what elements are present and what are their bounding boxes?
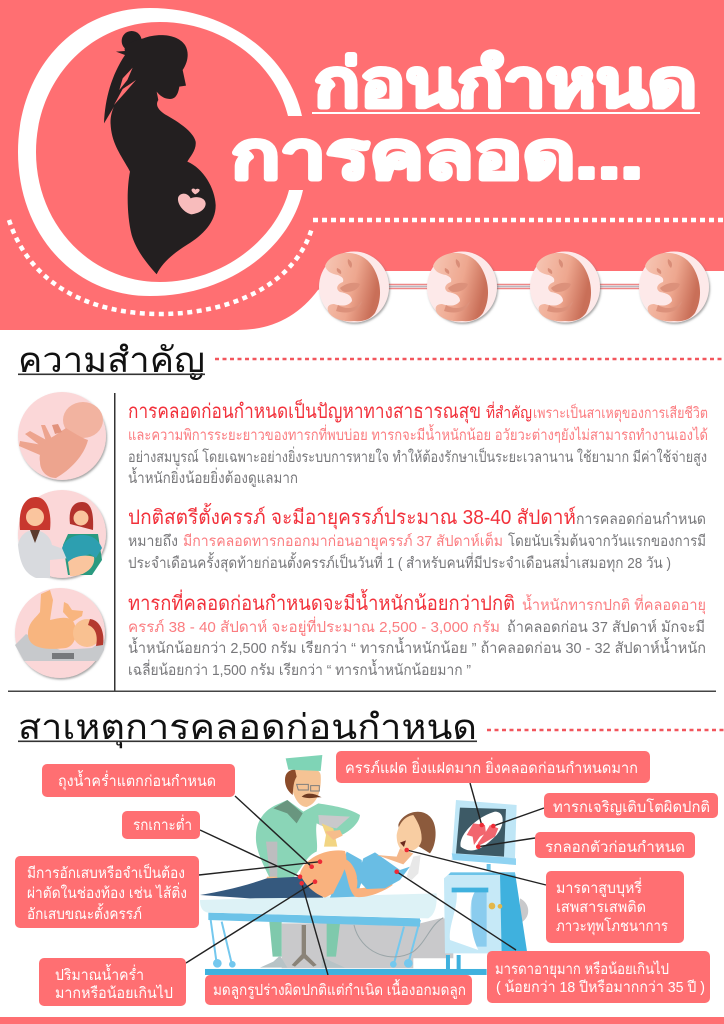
- doctor neck and face: [291, 767, 321, 807]
- dotted line: [313, 218, 724, 222]
- callout: uterus: มดลูกรูปร่างผิดปกติแต่กำเนิด เนื้องอกมดลูก: [213, 979, 466, 999]
- callout: smoking and malnutrition: ภาวะทุพโภชนาการ: [556, 917, 668, 936]
- callout: twins: [336, 751, 650, 783]
- text block 1: การคลอดก่อนกำหนดเป็นปัญหาทางสาธารณสุข: [128, 398, 481, 424]
- callout: inflammation: อักเสบขณะตั้งครรภ์: [27, 903, 142, 923]
- text block 1: [128, 398, 708, 487]
- white ring around silhouette: [18, 8, 303, 296]
- machine stand: [446, 955, 461, 969]
- mattress: [200, 893, 437, 918]
- title line 2: การคลอด...: [231, 118, 643, 192]
- monitor: [452, 800, 517, 860]
- text block 3: ทารกที่คลอดก่อนกำหนดจะมีน้ำหนักน้อยกว่าปกติ: [128, 589, 515, 615]
- text block 3: ถ้าคลอดก่อน 37 สัปดาห์ มักจะมี: [507, 619, 705, 636]
- icon: baby on scale circle: [15, 588, 105, 678]
- machine knobs: [489, 903, 502, 909]
- doctor hat: [286, 755, 322, 771]
- callout: twins: ครรภ์แฝด ยิ่งแฝดมาก ยิ่งคลอดก่อนกำหนดมาก: [345, 757, 638, 777]
- pillow: [407, 855, 421, 880]
- doctor moustache: [302, 794, 322, 798]
- callout: placental abruption: [535, 832, 695, 858]
- callout: uterus: [205, 975, 472, 1005]
- patient chest: [377, 848, 413, 864]
- doctor hair: [285, 769, 297, 795]
- ultrasound probe: [322, 823, 337, 847]
- doctor legs: [269, 922, 340, 957]
- callout pointer dots: [298, 823, 496, 886]
- fetus image 4: [639, 252, 709, 322]
- doctor glasses: [297, 784, 319, 791]
- callout: maternal age: [487, 951, 710, 1003]
- heading: causes: สาเหตุการคลอดก่อนกำหนด: [18, 708, 477, 748]
- callout: maternal age: ( น้อยกว่า 18 ปีหรือมากกว่า 35 ปี ): [496, 979, 705, 996]
- doctor hand: [267, 877, 283, 894]
- connecting lines between fetus images: [385, 284, 650, 286]
- callout: smoking and malnutrition: มารดาสูบบุหรี่: [556, 877, 642, 898]
- text block 3: เฉลี่ยน้อยกว่า 1,500 กรัม เรียกว่า “ ทารกน้ำหนักน้อยมาก ”: [128, 659, 471, 679]
- callout: low placenta: รกเกาะต่ำ: [133, 814, 192, 834]
- text block 2: การคลอดก่อนกำหนด: [576, 511, 706, 528]
- patient blue skirt: [330, 852, 363, 898]
- dotted arc: [9, 220, 312, 314]
- callout: amniotic fluid: [39, 958, 186, 1006]
- shoes: [260, 956, 345, 968]
- doctor body: [256, 800, 360, 878]
- callout: amniotic fluid: ปริมาณน้ำคร่ำ: [55, 964, 144, 984]
- patient shirt: [357, 852, 410, 889]
- patient belly: [300, 850, 346, 898]
- fetus image 2: [427, 252, 497, 322]
- callout: ruptured membranes: ถุงน้ำคร่ำแตกก่อนกำหนด: [58, 770, 216, 791]
- header banner: [0, 0, 724, 330]
- callout: abnormal growth: [544, 793, 718, 818]
- text block 2: มีการคลอดทารกออกมาก่อนอายุครรภ์ 37 สัปดาห์เต็ม: [183, 531, 503, 551]
- cable: [354, 918, 443, 957]
- callout: inflammation: [15, 856, 199, 928]
- bed legs: [210, 915, 420, 963]
- bottom bar: [0, 1017, 724, 1024]
- illustration: doctor, patient and ultrasound: [200, 755, 528, 975]
- fetus image 3: [530, 252, 600, 322]
- icon: heart: [178, 194, 206, 214]
- bed wheels: [213, 959, 413, 968]
- callout: low placenta: [122, 811, 200, 839]
- callout: ruptured membranes: [42, 764, 235, 797]
- text block 3: น้ำหนักน้อยกว่า 2,500 กรัม เรียกว่า “ ทารกน้ำหนักน้อย ” ถ้าคลอดก่อน 30 - 32 สัปดาห์น้ำหนัก: [128, 637, 706, 657]
- callout pointer lines: [186, 783, 546, 975]
- text block 3: ครรภ์ 38 - 40 สัปดาห์ จะอยู่ที่ประมาณ 2,500 - 3,000 กรัม: [128, 616, 500, 636]
- text block 1: ที่สำคัญ: [486, 401, 532, 422]
- icon: small heart: [192, 188, 200, 194]
- text block 3: น้ำหนักทารกปกติ ที่คลอดอายุ: [522, 594, 706, 615]
- text block 2: ปกติสตรีตั้งครรภ์ จะมีอายุครรภ์ประมาณ 38-40 สัปดาห์: [128, 503, 576, 530]
- stool: [292, 925, 317, 967]
- callout: placental abruption: รกลอกตัวก่อนกำหนด: [545, 839, 685, 856]
- callout: abnormal growth: ทารกเจริญเติบโตผิดปกติ: [553, 798, 710, 816]
- callout: inflammation: ผ่าตัดในช่องท้อง เช่น ไส้ติ่ง: [27, 882, 187, 902]
- text block 2: [128, 503, 706, 573]
- icon: fetus circle: [18, 392, 106, 480]
- callout: inflammation: มีการอักเสบหรือจำเป็นต้อง: [27, 863, 185, 882]
- divider: vertical line: [114, 393, 116, 691]
- divider: horizontal line: [8, 690, 716, 692]
- patient face: [397, 815, 422, 852]
- text block 2: หมายถึง: [128, 533, 178, 550]
- callout: smoking and malnutrition: [546, 871, 684, 943]
- floor shadow: [282, 898, 528, 968]
- text block 1: น้ำหนักยิ่งน้อยยิ่งต้องดูแลมาก: [128, 467, 298, 487]
- fetus image 1: [319, 252, 389, 322]
- floor bar: [205, 969, 487, 975]
- patient hair: [398, 812, 436, 853]
- heading: importance: ความสำคัญ: [18, 341, 205, 380]
- icon: doctor and mother circle: [18, 490, 106, 578]
- bed frame: [208, 913, 420, 927]
- pregnant woman silhouette: [104, 31, 216, 274]
- title underline: [312, 112, 700, 114]
- text block 3: [128, 589, 706, 679]
- patient legs: [200, 877, 323, 898]
- ultrasound machine: [444, 872, 527, 953]
- callout: smoking and malnutrition: เสพสารเสพติด: [556, 899, 646, 916]
- patient hand: [342, 858, 393, 897]
- title line 1: ก่อนกำหนด: [314, 46, 697, 120]
- callout: amniotic fluid: มากหรือน้อยเกินไป: [55, 984, 173, 1002]
- callout: maternal age: มารดาอายุมาก หรือน้อยเกินไป: [495, 960, 669, 979]
- text block 2: ประจำเดือนครั้งสุดท้ายก่อนตั้งครรภ์เป็นวันที่ 1 ( สำหรับคนที่มีประจำเดือนสม่ำเสมอทุก 28 วัน ): [128, 552, 671, 573]
